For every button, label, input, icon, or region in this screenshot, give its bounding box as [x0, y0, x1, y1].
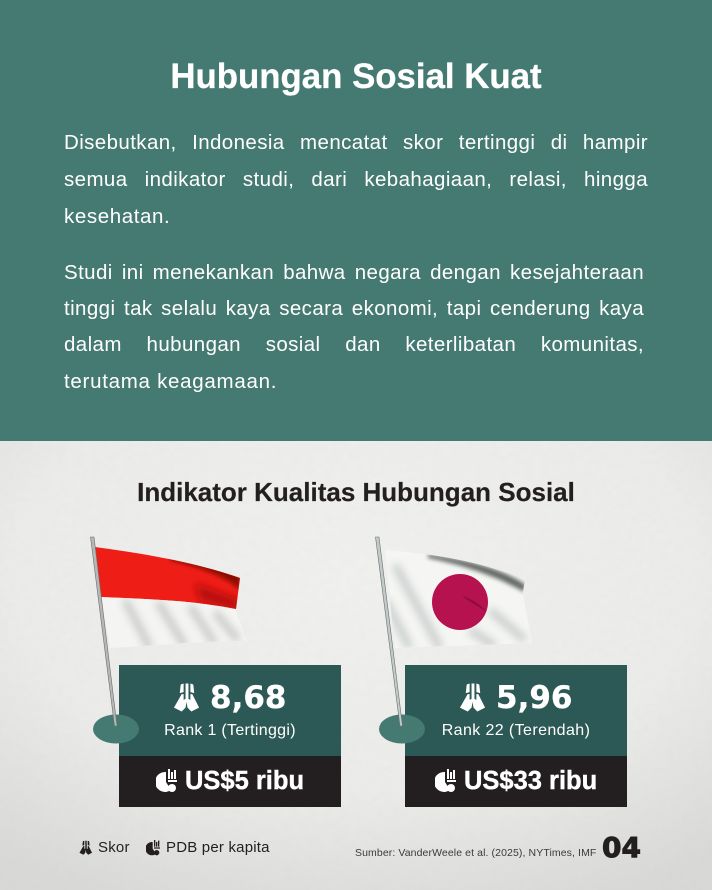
- page number: 04: [602, 831, 641, 864]
- text block: paragraph 1: Disebutkan, Indonesia mencatat skor tertinggi di hampir: [64, 131, 648, 154]
- card: Japan GDP: [405, 756, 627, 807]
- text block: paragraph 1: kesehatan.: [64, 205, 170, 228]
- card: Indonesia score: [119, 665, 341, 756]
- legend label: GDP: PDB per kapita: [166, 839, 270, 856]
- text block: paragraph 2: tinggi tak selalu kaya secara ekonomi, tapi cenderung kaya: [64, 297, 644, 320]
- Japan flag: [386, 552, 530, 648]
- GDP value: US$5 ribu: [185, 767, 304, 795]
- icon: GDP: [146, 840, 160, 856]
- panel: top section: [0, 0, 712, 441]
- source: Sumber: VanderWeele et al. (2025), NYTimes, IMF: [355, 847, 596, 859]
- icon: score: [80, 840, 92, 855]
- legend: [80, 839, 270, 856]
- text block: paragraph 2: Studi ini menekankan bahwa negara dengan kesejahteraan: [64, 261, 644, 284]
- text block: paragraph 2: dalam hubungan sosial dan keterlibatan komunitas,: [64, 333, 644, 356]
- icon: GDP chart: [156, 769, 177, 792]
- score value: 8,68: [210, 680, 286, 716]
- icon: GDP chart: [435, 769, 456, 792]
- text block: paragraph 1: semua indikator studi, dari kebahagiaan, relasi, hingga: [64, 168, 648, 191]
- rank label: Rank 22 (Terendah): [442, 722, 590, 739]
- Indonesia pole base: [93, 714, 139, 744]
- text block: paragraph 2: terutama keagamaan.: [64, 370, 277, 393]
- rank label: Rank 1 (Tertinggi): [164, 722, 296, 739]
- Indonesia flag pole: [90, 537, 117, 726]
- text block: paragraph 1: [64, 131, 648, 228]
- Indonesia flag: [96, 547, 240, 648]
- Japan flag pole: [376, 537, 402, 726]
- heading: indicator: Indikator Kualitas Hubungan Sosial: [137, 477, 575, 507]
- card: Japan score: [405, 665, 627, 756]
- GDP value: US$33 ribu: [464, 767, 597, 795]
- icon: praying hands: [460, 684, 485, 712]
- flags artwork layer: [90, 536, 530, 744]
- paper texture background: [0, 740, 712, 890]
- score value: 5,96: [496, 680, 572, 716]
- text block: paragraph 2: [64, 261, 644, 393]
- title: Hubungan Sosial Kuat: [170, 57, 542, 96]
- card: Indonesia GDP: [119, 756, 341, 807]
- legend label: score: Skor: [98, 839, 130, 856]
- icon: praying hands: [174, 684, 199, 712]
- Japan pole base: [379, 714, 425, 744]
